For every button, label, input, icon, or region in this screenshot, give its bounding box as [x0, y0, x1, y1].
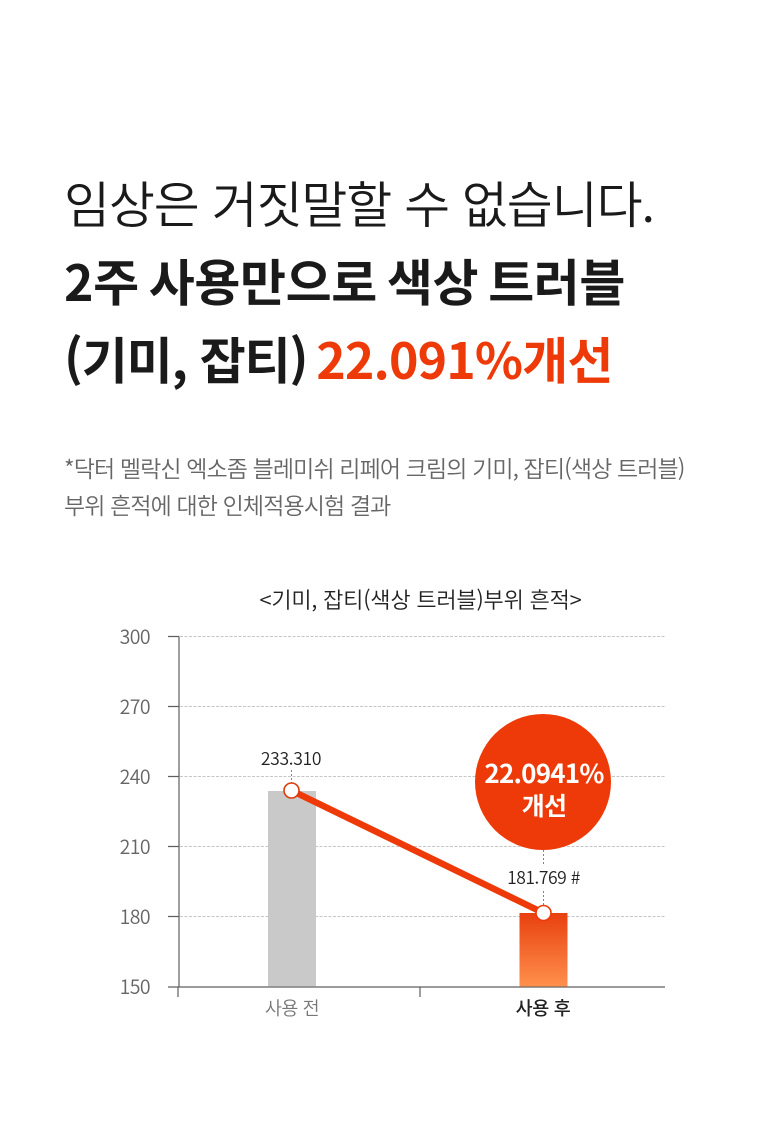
- trend line: [292, 790, 544, 913]
- y axis labels: 210: [120, 831, 150, 860]
- value: after: 181.769 #: [507, 865, 581, 890]
- y axis labels: 300: [120, 621, 150, 650]
- axes: [168, 636, 665, 997]
- callout: improvement circle: 22.0941%: [484, 754, 604, 791]
- marker: after: [536, 906, 551, 920]
- y axis labels: 270: [120, 691, 150, 720]
- description line 2: 부위 흔적에 대한 인체적용시험 결과: [64, 487, 390, 521]
- title line 3 with highlight: (기미, 잡티) 22.091%개선: [64, 322, 613, 394]
- title line 1: 임상은 거짓말할 수 없습니다.: [64, 166, 654, 238]
- description line 1: *닥터 멜락신 엑소좀 블레미쉬 리페어 크림의 기미, 잡티(색상 트러블): [64, 450, 685, 484]
- title: [64, 166, 654, 394]
- chart title: <기미, 잡티(색상 트러블)부위 흔적>: [259, 583, 582, 615]
- y axis labels: 150: [120, 971, 150, 1000]
- y axis labels: [120, 621, 150, 1000]
- value leader lines: [292, 770, 544, 906]
- y axis labels: 240: [120, 761, 150, 790]
- title line 2: 2주 사용만으로 색상 트러블: [64, 244, 625, 316]
- x label: after: 사용 후: [516, 995, 571, 1021]
- callout: improvement circle: 개선: [522, 787, 566, 823]
- value: before: 233.310: [261, 746, 321, 771]
- marker: before: [284, 783, 299, 798]
- description text: [64, 450, 685, 521]
- bar: before: [268, 791, 316, 986]
- bar: after: [520, 913, 568, 986]
- y axis labels: 180: [120, 901, 150, 930]
- callout: improvement circle: [475, 714, 611, 850]
- x label: before: 사용 전: [265, 995, 319, 1021]
